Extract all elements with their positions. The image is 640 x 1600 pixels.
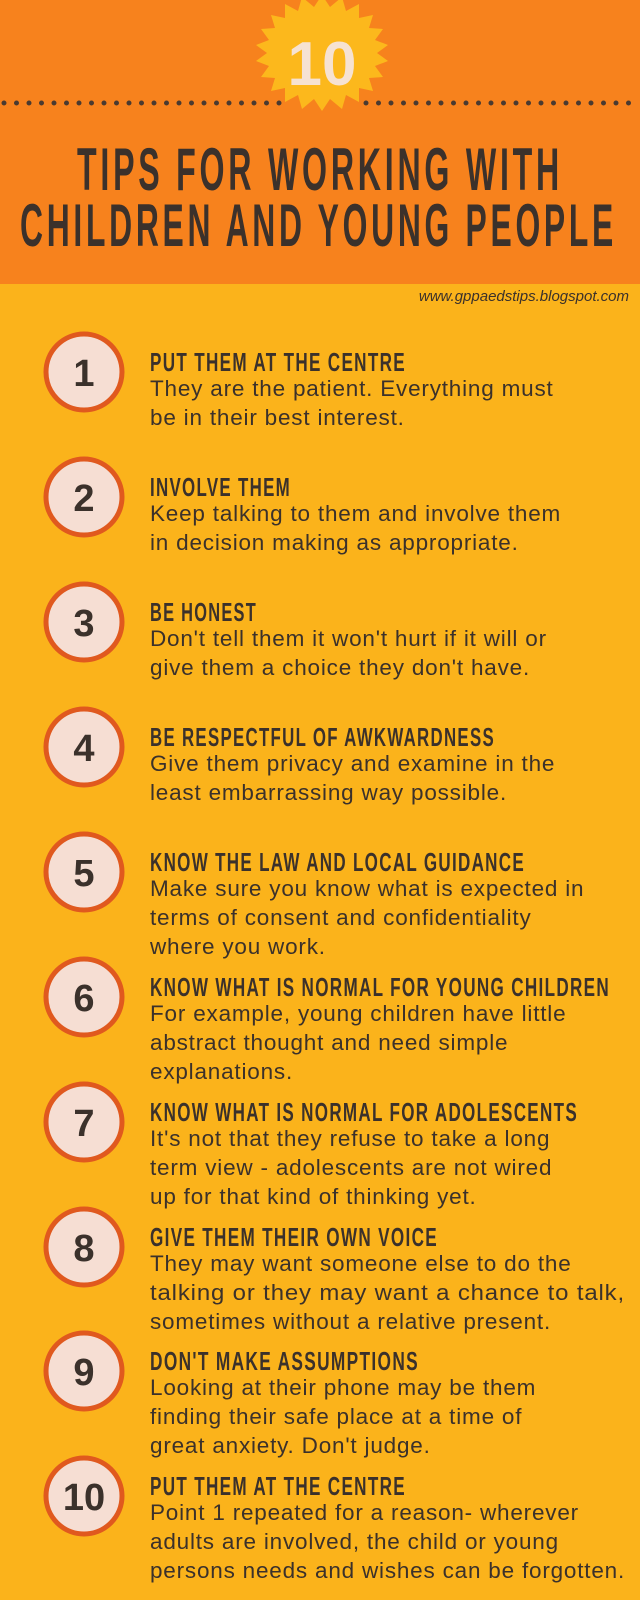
tip 6: 6 — [73, 978, 95, 1020]
tip 10: Point 1 repeated for a reason- wherever — [150, 1500, 579, 1525]
tip 3 — [46, 584, 547, 680]
tip 2: 2 — [73, 478, 95, 520]
tip 8 — [46, 1209, 625, 1334]
tip 4: least embarrassing way possible. — [150, 780, 507, 805]
tip 3: 3 — [73, 603, 95, 645]
tip 9: Looking at their phone may be them — [150, 1375, 536, 1400]
tip 7: It's not that they refuse to take a long — [150, 1126, 550, 1151]
tip 7: 7 — [73, 1103, 95, 1145]
tip 10: persons needs and wishes can be forgotten. — [150, 1558, 625, 1583]
url: www.gppaedstips.blogspot.com — [419, 288, 629, 305]
tip 8: sometimes without a relative present. — [150, 1309, 551, 1334]
tip 2: in decision making as appropriate. — [150, 530, 519, 555]
tip 3: BE HONEST — [150, 597, 257, 627]
tip 7: term view - adolescents are not wired — [150, 1155, 552, 1180]
tip 10: 10 — [63, 1477, 105, 1519]
tip 8: They may want someone else to do the — [150, 1251, 572, 1276]
tip 8: talking or they may want a chance to talk, — [150, 1280, 625, 1305]
tip 8: GIVE THEM THEIR OWN VOICE — [150, 1222, 438, 1252]
tip 2: INVOLVE THEM — [150, 472, 291, 502]
tip 1: PUT THEM AT THE CENTRE — [150, 347, 406, 377]
tip 5: Make sure you know what is expected in — [150, 876, 584, 901]
tip 5: where you work. — [149, 934, 326, 959]
tip 2: Keep talking to them and involve them — [150, 501, 561, 526]
tip 10: adults are involved, the child or young — [150, 1529, 559, 1554]
tip 6 — [46, 959, 610, 1084]
tip 2 — [46, 459, 561, 555]
tip 9 — [46, 1333, 536, 1458]
tip 8: 8 — [73, 1228, 95, 1270]
title — [20, 136, 617, 259]
tip 10 — [46, 1458, 625, 1583]
tip 10: PUT THEM AT THE CENTRE — [150, 1471, 406, 1501]
tip 3: give them a choice they don't have. — [150, 655, 530, 680]
icon: star badge with 10 — [256, 0, 388, 111]
tip 7: up for that kind of thinking yet. — [150, 1184, 477, 1209]
tip 1: be in their best interest. — [150, 405, 405, 430]
tip 1 — [46, 334, 554, 430]
icon: star badge with 10: 10 — [288, 30, 356, 99]
tip 9: finding their safe place at a time of — [150, 1404, 522, 1429]
header band — [0, 0, 640, 284]
tip 4: 4 — [73, 728, 95, 770]
tip 3: Don't tell them it won't hurt if it will or — [150, 626, 547, 651]
tip 9: DON'T MAKE ASSUMPTIONS — [150, 1346, 419, 1376]
tip 6: abstract thought and need simple — [150, 1030, 508, 1055]
tip 9: 9 — [73, 1352, 95, 1394]
tip 1: 1 — [73, 353, 95, 395]
tip 5 — [46, 834, 584, 959]
tip 5: 5 — [73, 853, 95, 895]
tip 9: great anxiety. Don't judge. — [150, 1433, 431, 1458]
tip 6: For example, young children have little — [150, 1001, 566, 1026]
tip 5: terms of consent and confidentiality — [150, 905, 532, 930]
tip 4: Give them privacy and examine in the — [150, 751, 555, 776]
tip 4 — [46, 709, 555, 805]
tip 7 — [46, 1084, 578, 1209]
tip 1: They are the patient. Everything must — [150, 376, 554, 401]
tip 6: explanations. — [150, 1059, 293, 1084]
